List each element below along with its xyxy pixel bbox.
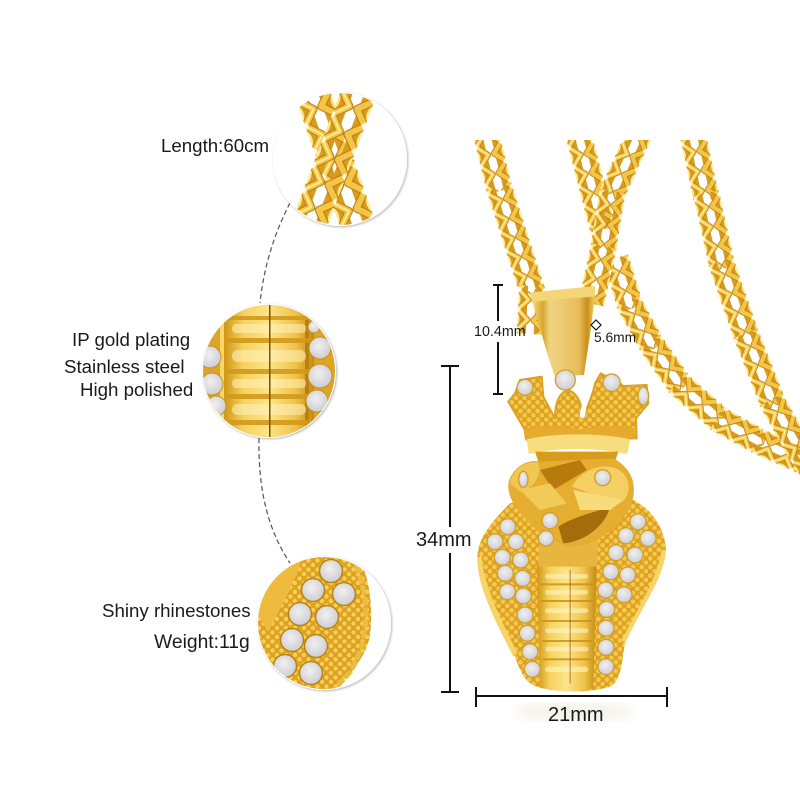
label: polished: High polished [80,379,193,400]
label: 5.6mm: 5.6mm [594,330,636,345]
label: steel: Stainless steel [64,356,184,377]
label: 21mm: 21mm [548,704,604,726]
hood [477,483,666,691]
crown [508,370,649,467]
bail [529,286,595,377]
label: 10.4mm: 10.4mm [474,324,526,340]
label: plating: IP gold plating [72,329,190,350]
rhinestones [487,514,656,677]
circle: rhinestone detail [250,556,391,695]
dimension line: bail width [591,320,601,330]
belly ribs [537,523,600,691]
dashed connector: chain to plating circle [260,203,290,303]
dashed connector: plating to rhinestone circle [259,438,290,563]
label: rhinestones: Shiny rhinestones [102,600,251,621]
dimension line: pendant width [476,687,667,707]
dimension line: bail height [493,285,503,394]
label: length: Length:60cm [161,135,269,156]
dimension line: pendant height [441,366,459,692]
cobra head [508,458,634,547]
pendant: cobra with crown [477,286,666,691]
chain: necklace strands [470,115,800,475]
circle: chain detail [273,84,407,236]
circle: plating detail [199,300,340,440]
label: weight: Weight:11g [154,632,250,653]
label: 34mm: 34mm [416,529,472,551]
pendant shadow reflection [515,704,635,720]
